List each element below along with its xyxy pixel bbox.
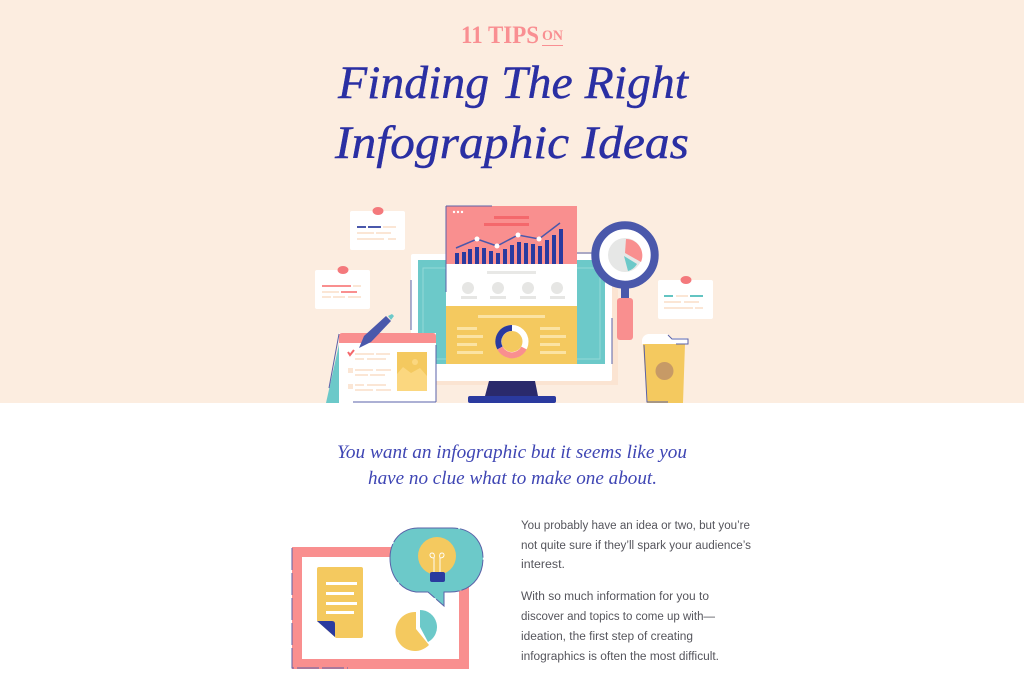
paragraph 2 <box>521 591 719 663</box>
header bars <box>484 216 529 226</box>
check mark <box>348 350 354 355</box>
window dots <box>453 211 463 213</box>
monitor shadow <box>425 262 618 385</box>
document icon <box>317 567 363 638</box>
speech bubble with light bulb <box>390 528 483 606</box>
line chart <box>456 223 560 248</box>
donut chart <box>498 328 526 355</box>
dashboard panel <box>446 206 577 364</box>
light bulb <box>418 537 456 582</box>
title <box>334 57 689 169</box>
checklist <box>348 353 391 391</box>
paragraph 1 <box>521 520 751 571</box>
title: Finding The Right <box>337 57 689 109</box>
hero background panel <box>0 0 1024 403</box>
body copy <box>521 520 751 663</box>
note 1 <box>350 207 405 250</box>
paragraph 2: discover and topics to come up with— <box>521 611 715 623</box>
paragraph 2: infographics is often the most difficult. <box>521 651 719 663</box>
paragraph 1: interest. <box>521 559 565 571</box>
image placeholder <box>397 352 427 391</box>
presentation frame <box>292 548 464 668</box>
eyebrow: 11 tips on: ON <box>542 28 563 44</box>
avatars row <box>461 271 565 299</box>
intro heading: You want an infographic but it seems like you <box>337 442 687 463</box>
hero illustration <box>315 206 713 403</box>
monitor stand <box>468 381 556 403</box>
pie chart <box>395 610 437 651</box>
monitor frame <box>411 253 612 381</box>
title: Infographic Ideas <box>334 117 689 169</box>
tablet <box>326 333 436 403</box>
intro heading <box>337 442 687 489</box>
note 2 <box>315 266 370 309</box>
eyebrow: 11 tips on: 11 TIPS <box>461 22 539 49</box>
pen <box>359 314 394 348</box>
paragraph 1: You probably have an idea or two, but you’re <box>521 520 750 532</box>
paragraph 2: With so much information for you to <box>521 591 709 603</box>
yellow section lines <box>457 315 566 354</box>
intro heading: have no clue what to make one about. <box>368 468 657 489</box>
bar chart <box>455 229 563 264</box>
paragraph 2: ideation, the first step of creating <box>521 631 693 643</box>
coffee cup <box>642 334 688 403</box>
note 3 <box>658 276 713 319</box>
magnifying glass <box>595 225 655 340</box>
paragraph 1: not quite sure if they’ll spark your audience’s <box>521 540 751 552</box>
ideation illustration <box>292 528 483 668</box>
